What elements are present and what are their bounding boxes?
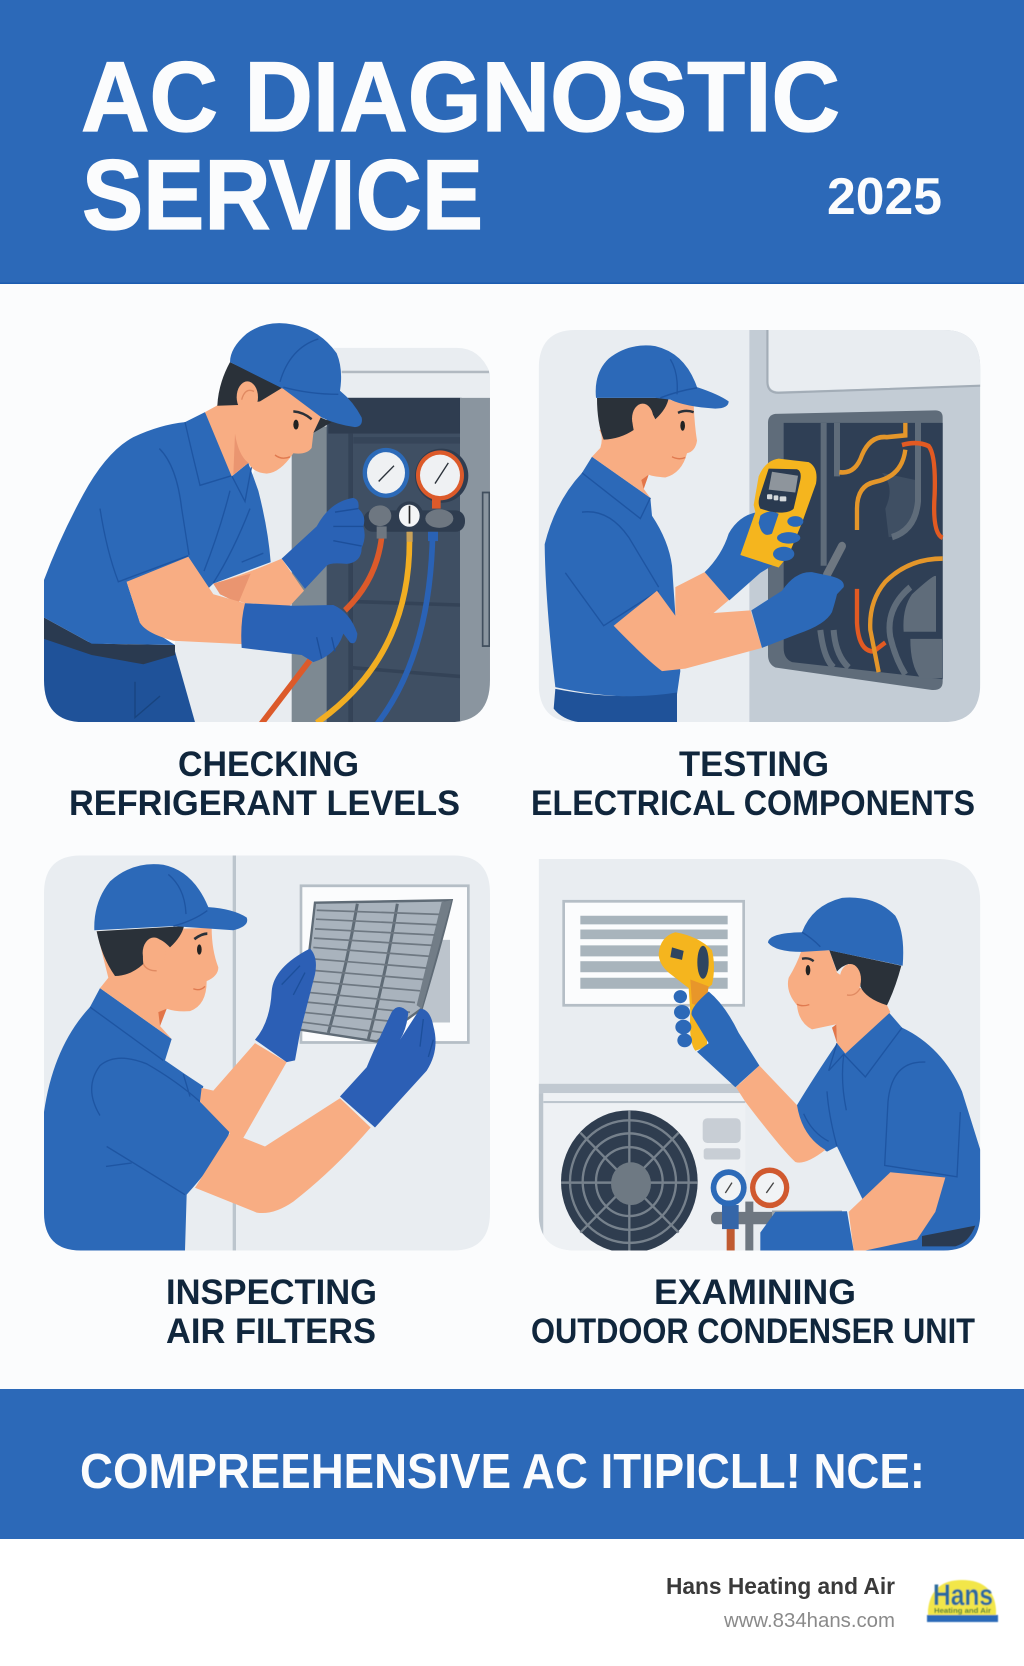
caption: inspecting air filters — [166, 1273, 377, 1351]
website: www.834hans.com — [723, 1610, 895, 1632]
caption: inspecting air filters: AIR FILTERS — [166, 1312, 376, 1351]
near glove — [241, 603, 357, 662]
condenser fan — [561, 1110, 698, 1253]
caption: checking refrigerant levels: REFRIGERANT LEVELS — [69, 784, 460, 823]
pants — [554, 689, 677, 722]
shirt — [44, 988, 230, 1250]
refrigerant hoses — [261, 532, 433, 725]
glove finger lines — [317, 509, 363, 659]
panel: testing electrical components — [539, 330, 980, 722]
wall background — [539, 859, 980, 1250]
footer white area — [0, 1539, 1024, 1666]
lower glove — [760, 1211, 854, 1250]
back glove — [705, 512, 772, 600]
logo: Heating and Air — [934, 1608, 991, 1615]
panel: inspecting air filters — [44, 855, 490, 1250]
wall background — [539, 330, 980, 722]
cap — [768, 898, 903, 966]
caption: examining outdoor condenser unit: EXAMINING — [654, 1273, 856, 1312]
company name: Hans Heating and Air — [666, 1573, 895, 1599]
back arm — [675, 572, 729, 616]
air filter — [298, 900, 452, 1041]
shirt — [545, 457, 680, 697]
head — [205, 323, 362, 476]
cap — [94, 864, 247, 930]
near arm — [127, 557, 245, 644]
caption: testing electrical components: ELECTRICAL COMPONENTS — [531, 784, 975, 823]
manifold gauges — [711, 1167, 842, 1250]
far arm — [213, 559, 304, 606]
header band — [0, 0, 1024, 284]
cap — [230, 323, 362, 427]
lower arm — [849, 1172, 945, 1250]
arm shadow — [213, 574, 251, 603]
title: AC DIAGNOSTIC — [81, 41, 840, 152]
thermometer — [659, 932, 714, 1051]
upper glove — [674, 990, 759, 1087]
wall seam — [233, 855, 236, 1250]
head — [592, 345, 729, 498]
unit background — [175, 348, 490, 722]
front arm — [614, 591, 762, 671]
logo: Hans — [933, 1579, 993, 1612]
caption: examining outdoor condenser unit — [531, 1273, 975, 1351]
left glove — [255, 948, 316, 1062]
belt — [922, 1226, 975, 1246]
fingers — [759, 512, 803, 561]
head — [94, 864, 247, 1039]
arms — [195, 1043, 371, 1213]
shirt — [797, 1012, 980, 1250]
footer band — [0, 1389, 1024, 1539]
caption: examining outdoor condenser unit: OUTDOOR CONDENSER UNIT — [531, 1312, 975, 1351]
multimeter — [740, 459, 817, 567]
raised arm — [736, 1066, 825, 1163]
shirt seams — [90, 1007, 200, 1195]
condenser unit — [539, 1084, 745, 1253]
title: SERVICE — [82, 139, 483, 250]
glove creases — [282, 966, 433, 1057]
shirt seams — [565, 473, 659, 626]
manifold gauges — [363, 448, 468, 542]
wall vent — [564, 901, 744, 1005]
caption: testing electrical components: TESTING — [679, 745, 829, 784]
wires — [839, 423, 943, 672]
cap — [596, 345, 729, 409]
right glove — [340, 1007, 436, 1128]
caption: inspecting air filters: INSPECTING — [166, 1273, 377, 1312]
shirt seams — [804, 1028, 960, 1177]
panel: checking refrigerant levels — [44, 323, 490, 725]
logo — [927, 1579, 998, 1622]
front glove — [751, 572, 844, 648]
title — [81, 41, 840, 250]
caption: checking refrigerant levels: CHECKING — [178, 745, 359, 784]
year: 2025 — [827, 168, 942, 226]
filter housing — [301, 886, 468, 1042]
head — [768, 898, 903, 1053]
pants and belt — [44, 617, 195, 722]
caption: checking refrigerant levels — [69, 745, 460, 823]
caption: testing electrical components — [531, 745, 975, 823]
shirt — [44, 412, 271, 645]
wall background — [44, 855, 490, 1250]
panel: examining outdoor condenser unit — [539, 859, 980, 1253]
far glove — [282, 498, 365, 589]
footer slogan: COMPREEHENSIVE AC ITIPICLL! NCE: — [80, 1445, 925, 1499]
electrical panel — [768, 410, 943, 690]
